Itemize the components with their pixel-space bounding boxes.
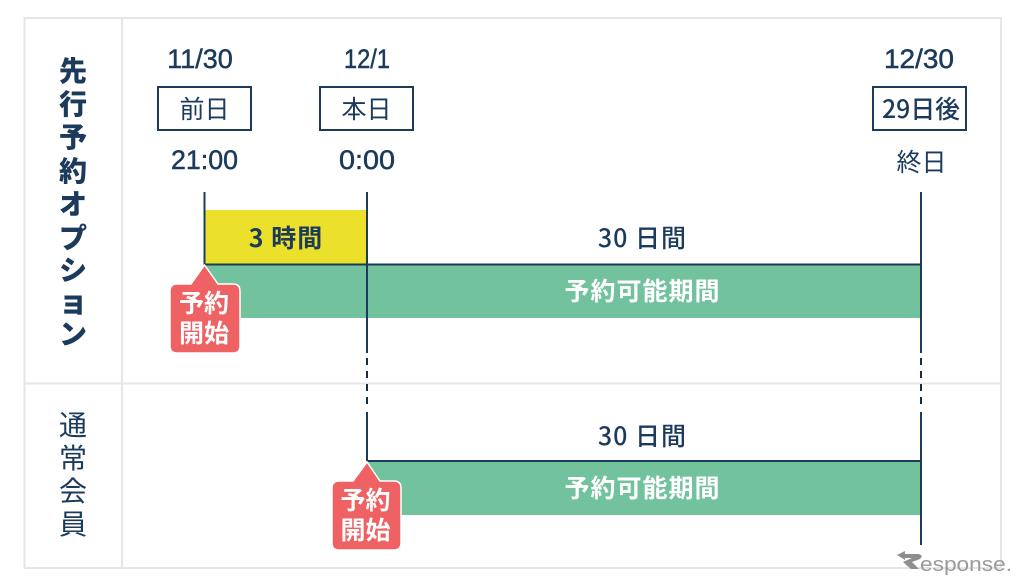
green bar: priority reservation period xyxy=(205,264,921,318)
column: 12/1: 0:00 xyxy=(339,145,395,175)
green bar: regular reservation period xyxy=(367,461,921,515)
row heading: priority reservation option: プ xyxy=(59,217,87,257)
row heading: regular member: 常 xyxy=(59,437,87,477)
callout: reservation start, regular row xyxy=(332,462,401,550)
column: 12/30: 29日後 xyxy=(882,90,960,126)
row heading: priority reservation option xyxy=(58,50,88,353)
column: 12/1: 本日 xyxy=(341,90,392,126)
row heading: priority reservation option: 行 xyxy=(59,83,87,123)
column: 11/30 xyxy=(158,44,251,175)
yellow bar: 3 hours: 3 時間 xyxy=(249,219,323,255)
label: 30 days, priority row: 30 日間 xyxy=(598,219,687,255)
yellow bar: 3 hours xyxy=(205,210,367,264)
column: 11/30: 11/30 xyxy=(167,44,233,74)
green bar: priority reservation period: 予約可能期間 xyxy=(564,272,721,308)
callout: reservation start, priority row: 予約 xyxy=(179,284,229,320)
column: 12/30: 12/30 xyxy=(884,44,954,74)
callout: reservation start, regular row: 開始 xyxy=(340,511,391,547)
callout: reservation start, regular row: 予約 xyxy=(340,481,391,517)
row heading: priority reservation option: オ xyxy=(59,183,87,223)
column: 12/1: 12/1 xyxy=(344,44,390,74)
column: 11/30: 前日 xyxy=(179,90,230,126)
column: 12/30 xyxy=(873,44,966,179)
row heading: priority reservation option: ン xyxy=(59,313,87,353)
timeline lines xyxy=(204,192,921,545)
row heading: priority reservation option: ョ xyxy=(58,279,88,321)
callout: reservation start, priority row: 開始 xyxy=(179,314,229,350)
column: 11/30: 21:00 xyxy=(171,145,238,175)
row heading: priority reservation option: シ xyxy=(59,249,87,289)
row heading: priority reservation option: 先 xyxy=(59,50,87,90)
row heading: regular member: 会 xyxy=(59,470,87,510)
row heading: priority reservation option: 予 xyxy=(59,116,87,156)
row heading: regular member: 員 xyxy=(59,503,87,543)
watermark: Response logo xyxy=(897,551,1012,576)
row heading: priority reservation option: 約 xyxy=(59,150,87,190)
label: 30 days, regular row: 30 日間 xyxy=(598,417,687,453)
green bar: regular reservation period: 予約可能期間 xyxy=(564,469,721,505)
column: 12/30: 終日 xyxy=(896,143,947,179)
dashed connectors xyxy=(367,358,921,410)
column: 12/1 xyxy=(320,44,413,175)
watermark: Response logo: esponse. xyxy=(920,554,1012,576)
callout: reservation start, priority row xyxy=(170,265,240,353)
row heading: regular member xyxy=(59,404,87,543)
row heading: regular member: 通 xyxy=(59,404,87,444)
